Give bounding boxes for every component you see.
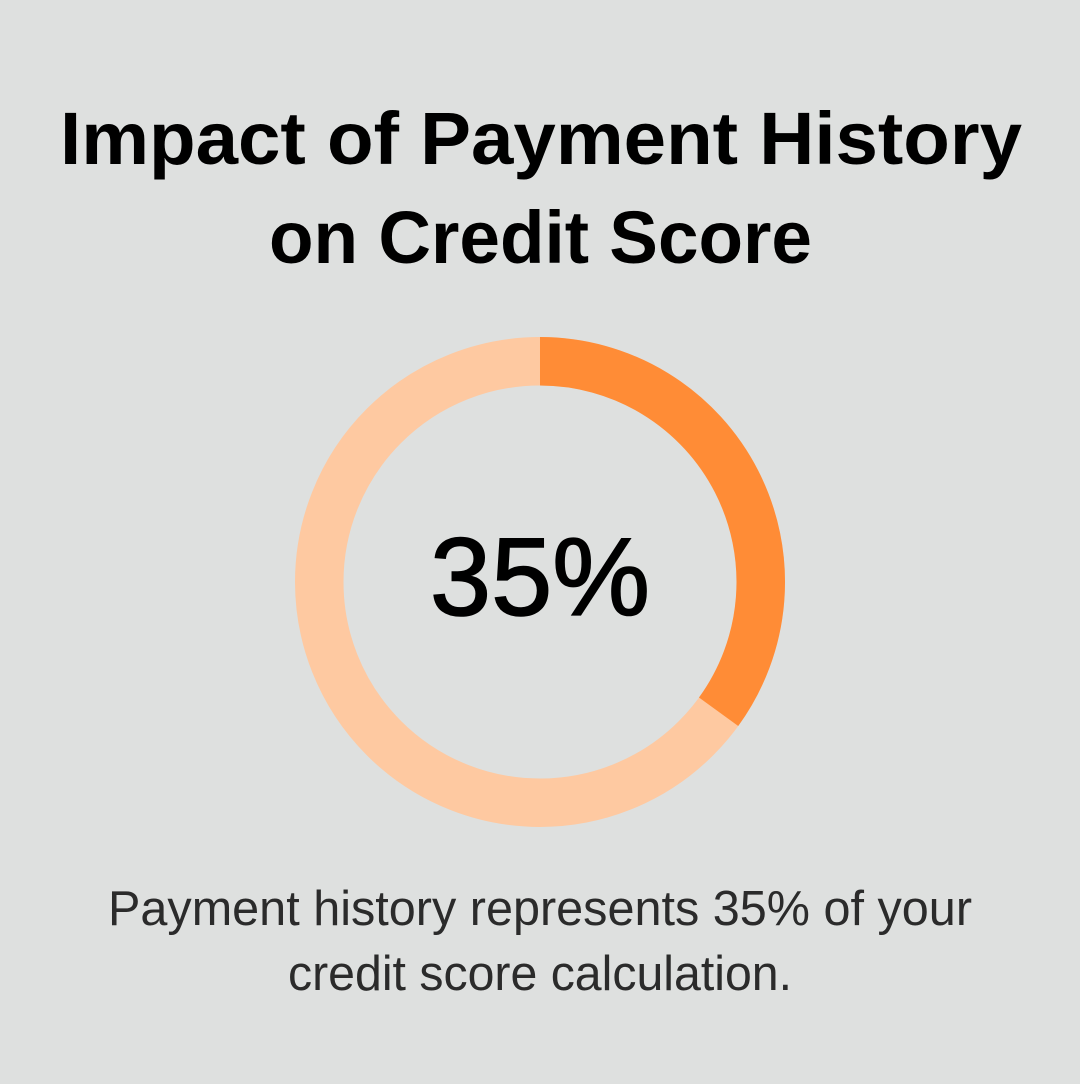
donut track: remaining 65% bbox=[319, 361, 761, 803]
donut chart bbox=[319, 361, 761, 803]
center value: 35% bbox=[430, 516, 650, 639]
title: Impact of Payment History bbox=[60, 97, 1022, 180]
description: Payment history represents 35% of your bbox=[108, 882, 972, 936]
title: on Credit Score bbox=[269, 196, 812, 279]
description: credit score calculation. bbox=[288, 947, 792, 1001]
description bbox=[108, 882, 972, 1001]
donut segment: 35% bbox=[540, 361, 761, 712]
title bbox=[60, 97, 1022, 279]
